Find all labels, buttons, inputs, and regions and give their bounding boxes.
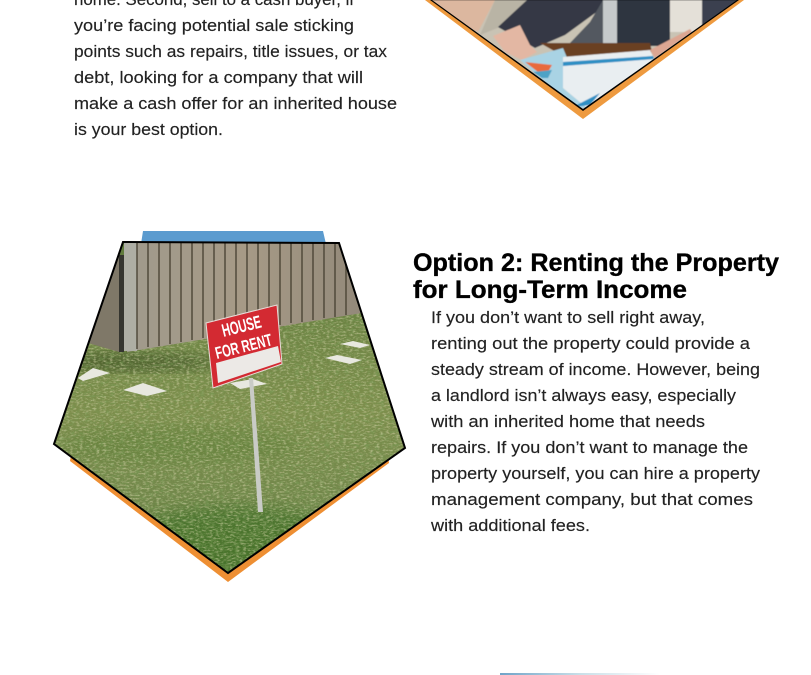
heading: option 2 [413, 249, 779, 304]
text block: option 2 paragraph: management company, but that comes [431, 490, 753, 509]
text block: option 1 closing paragraph: make a cash offer for an inherited house [74, 94, 397, 113]
text block: option 1 closing paragraph [74, 0, 397, 139]
text block: option 2 paragraph: If you don’t want to sell right away, [431, 308, 705, 327]
text block: option 2 paragraph: with an inherited home that needs [430, 412, 705, 431]
text block: option 1 closing paragraph: you’re facing potential sale sticking [74, 16, 354, 35]
image: house for rent sign on a lawn in a pentagon frame: FOR RENT [213, 330, 275, 363]
text block: option 1 closing paragraph: is your best option. [74, 120, 223, 139]
text block: option 2 paragraph: with additional fees. [430, 516, 590, 535]
image: advisor reviewing documents in a pentagon frame [425, 0, 745, 120]
text block: option 2 paragraph: renting out the property could provide a [431, 334, 751, 353]
text block: option 1 closing paragraph: points such as repairs, title issues, or tax [74, 42, 388, 61]
heading: option 2: Option 2: Renting the Property [413, 249, 779, 277]
text block: option 2 paragraph: steady stream of income. However, being [431, 360, 760, 379]
text block: option 2 paragraph: a landlord isn’t always easy, especially [431, 386, 737, 405]
text block: option 2 paragraph: property yourself, you can hire a property [431, 464, 761, 483]
text block: option 1 closing paragraph: debt, looking for a company that will [74, 68, 363, 87]
text block: option 2 paragraph: repairs. If you don’t want to manage the [431, 438, 748, 457]
text block: option 2 paragraph [430, 308, 761, 535]
heading: option 2: for Long-Term Income [413, 276, 687, 304]
image: house for rent sign on a lawn in a pentagon frame: HOUSE [220, 312, 263, 341]
next section blue accent, cropped at page edge [500, 673, 660, 675]
image: house for rent sign on a lawn in a pentagon frame [40, 231, 410, 582]
